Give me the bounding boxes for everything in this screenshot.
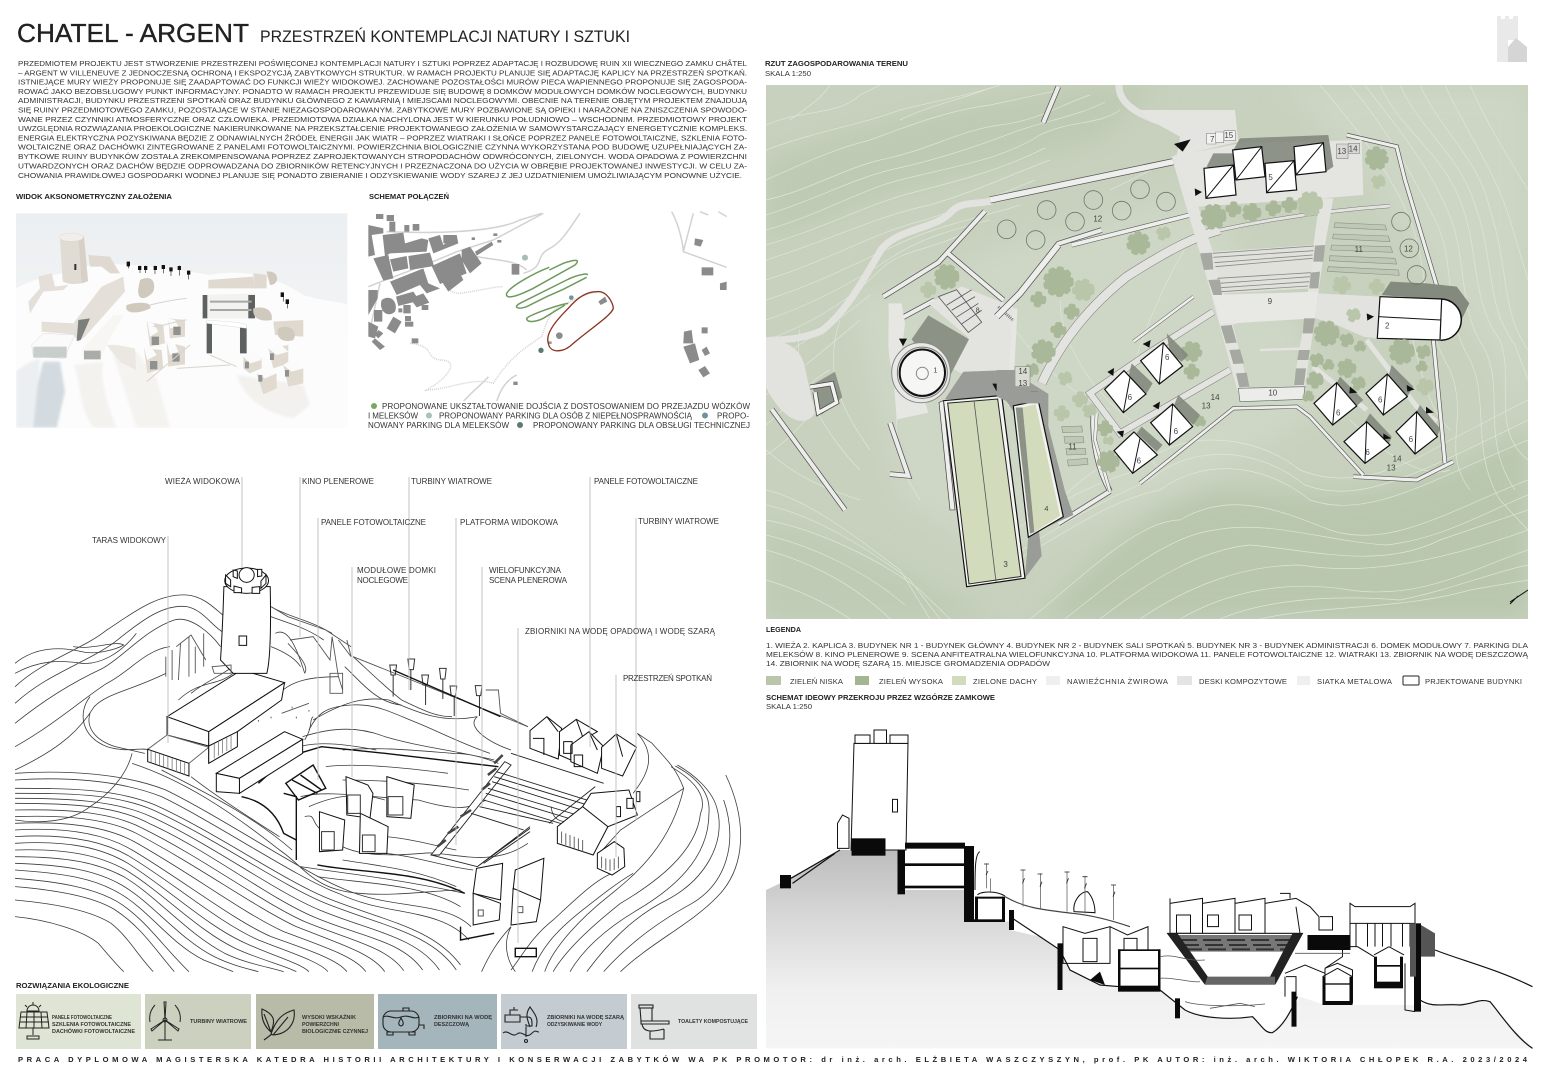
curved walkways	[1042, 206, 1390, 433]
plan numbers: 4	[1044, 504, 1048, 513]
entry arrows	[899, 338, 1038, 392]
text block: legend: MELEKSÓW 8. KINO PLENEROWE 9. SCENA ANFITEATRALNA WIELOFUNKCYJNA 10. PLATFORMA WIDOKOWA 11. PANELE FOTOWOLTAICZNE 12. WIATRAKI 13. ZBIORNIK NA WODĘ DESZCZOWĄ	[766, 650, 1529, 659]
text block: project description: UWZGLĘDNIA ROZWIĄZANIA PROEKOLOGICZNE NAKIERUNKOWANE NA PRZEKSZTAŁCENIE PROJEKTOWANEGO ZAŁOŻENIA W SAMOWYSTARCZAJĄCY ENERGETYCZNIE KOMPLEKS.	[18, 124, 747, 133]
terrain line	[791, 850, 1532, 1048]
building 3	[939, 396, 1025, 587]
plan numbers: 13	[1337, 147, 1347, 156]
rectangular panels 11	[1062, 223, 1399, 466]
panel: biologically active surface	[256, 994, 374, 1049]
heading: connection scheme: SCHEMAT POŁĄCZEŃ	[369, 192, 449, 201]
plan numbers: 11	[1068, 442, 1077, 451]
legend: connection scheme: I MELEKSÓW	[368, 412, 418, 420]
text block: project description: ROWAĆ JAKO BEZOBSŁUGOWY PUNKT INFORMACYJNY. PONADTO W RAMACH PROJEKTU PRZEWIDUJE SIĘ BUDOWĘ 8 DOMKÓW MODUŁOWYCH DOMKÓW NOCLEGOWYCH, BUDYNKU	[18, 87, 747, 96]
terrain contours	[15, 595, 741, 972]
callouts: axonometric labels: ZBIORNIKI NA WODĘ OPADOWĄ I WODĘ SZARĄ	[525, 627, 716, 636]
panel: wind turbines: TURBINY WIATROWE	[190, 1019, 247, 1025]
plan numbers: 6	[1409, 435, 1414, 444]
icon: castle logo	[1497, 16, 1527, 62]
text block: project description	[18, 59, 748, 180]
panel: grey water tanks	[501, 994, 627, 1049]
callouts: axonometric labels: TURBINY WIATROWE	[411, 477, 492, 486]
plan numbers: 10	[1268, 389, 1278, 398]
chart: cross section through the castle hill	[766, 730, 1532, 1048]
upper curved road	[1119, 85, 1165, 123]
plan numbers: 6	[1165, 353, 1170, 362]
panel: solar panels	[16, 994, 141, 1049]
text block: project description: UTWARDZONYCH ORAZ DACHÓW BĘDZIE ODPROWADZANA DO ZBIORNIKÓW RETENCYJNYCH I PRZEZNACZONA DO UŻYCIA W OBRĘBIE PROJEKTOWANEJ INWESTYCJI. W CELU ZA-	[18, 161, 748, 170]
callouts: axonometric labels: PRZESTRZEŃ SPOTKAŃ	[623, 674, 712, 683]
legend: connection scheme	[368, 402, 750, 430]
icon: turbine	[150, 1002, 180, 1040]
left part of plan	[765, 85, 1165, 587]
text block: legend: 1. WIEŻA 2. KAPLICA 3. BUDYNEK NR 1 - BUDYNEK GŁÓWNY 4. BUDYNEK NR 2 - BUDYNEK SALI SPOTKAŃ 5. BUDYNEK NR 3 - BUDYNEK ADMINISTRACJI 6. DOMEK MODUŁOWY 7. PARKING DLA	[766, 641, 1529, 650]
callouts: axonometric labels: KINO PLENEROWE	[302, 477, 374, 486]
amphitheatre cross-section	[1160, 923, 1435, 1008]
legend: surface swatches: SIATKA METALOWA	[1317, 677, 1393, 686]
legend: surface swatches: ZIELONE DACHY	[973, 677, 1037, 686]
modular houses 6	[1105, 333, 1440, 473]
plan numbers: 6	[1137, 456, 1142, 465]
legend: surface swatches: PRJEKTOWANE BUDYNKI	[1425, 677, 1522, 686]
text block: project description: ADMINISTRACJI, BUDYNKU PRZESTRZENI SPOTKAŃ ORAZ BUDYNKU GŁÓWNEGO Z KAWIARNIĄ I MIEJSCAMI NOCLEGOWYMI. OBECNIE NA TERENIE OBJĘTYM PROJEKTEM ZNAJDUJĄ	[18, 96, 748, 105]
walls	[772, 87, 1110, 524]
icon: north arrow	[1510, 590, 1528, 604]
top plaza	[1172, 140, 1363, 207]
text block: legend: LEGENDA	[766, 625, 801, 634]
map roads	[368, 212, 727, 402]
access road	[765, 201, 992, 341]
text block: project description: BYTKOWE RUINY BUDYNKÓW ZOSTAŁA ZREKOMPENSOWANA POPRZEZ ZAPROJEKTOWANYCH STROPODACHÓW ODWRÓCONYCH, ZIELONYCH. WODA OPADOWA Z POWIERZCHNI	[18, 152, 747, 161]
legend: surface swatches: DESKI KOMPOZYTOWE	[1199, 677, 1287, 686]
legend: connection scheme: PROPO-	[717, 412, 749, 420]
callouts: axonometric labels: PANELE FOTOWOLTAICZNE	[594, 477, 698, 486]
modular houses: top row	[530, 717, 637, 776]
title: CHATEL - ARGENT	[17, 18, 249, 48]
building: second box	[216, 732, 303, 793]
plan numbers	[1018, 131, 1414, 473]
model houses	[144, 318, 303, 394]
plan numbers: 13	[1202, 402, 1211, 411]
chart: axonometric line drawing	[15, 568, 741, 972]
heading: ecological solutions: ROZWIĄZANIA EKOLOGICZNE	[16, 981, 129, 990]
modular houses: middle group	[319, 777, 414, 853]
building and shadow: small ruin	[810, 372, 842, 414]
plan numbers: 9	[1268, 297, 1273, 306]
plan numbers: 12	[1093, 215, 1103, 224]
plan numbers: 14	[1018, 367, 1028, 376]
long paths	[990, 135, 1453, 492]
panel: grey water tanks: ZBIORNIKI NA WODĘ SZARĄ	[547, 1015, 624, 1021]
callouts: axonometric labels: NOCLEGOWE	[357, 576, 408, 585]
icon: solar panel	[19, 1002, 49, 1039]
plan numbers: 7	[1210, 135, 1215, 144]
contour lines	[766, 85, 1528, 619]
icon: toilet	[639, 1005, 669, 1039]
map buildings	[368, 214, 727, 385]
panel: solar panels: PANELE FOTOWOLTAICZNE	[52, 1015, 112, 1021]
plan numbers: 14	[1349, 144, 1358, 153]
plan numbers: 13	[1018, 379, 1028, 388]
text block: project description: ENERGIA ELEKTRYCZNA POZYSKIWANA BĘDZIE Z ODNAWIALNYCH ŹRÓDEŁ ENERGII JAK WIATR – POPRZEZ WIATRAKI I SŁOŃCE POPRZEZ PANELE FOTOWOLTAICZNE, SZKLENIA FOTO-	[18, 133, 747, 142]
heading: site plan: SKALA 1:250	[765, 69, 811, 78]
title: PRZESTRZEŃ KONTEMPLACJI NATURY I SZTUKI	[260, 27, 630, 46]
callouts: axonometric labels: WIELOFUNKCYJNA	[489, 566, 562, 575]
plan numbers: 13	[1387, 464, 1396, 473]
panel: compost toilets	[631, 994, 757, 1049]
plan numbers: 14	[1393, 454, 1402, 463]
plan numbers: 3	[1003, 560, 1008, 569]
tower	[221, 568, 271, 673]
wind turbines	[984, 863, 1116, 920]
panel: solar panels: DACHÓWKI FOTOWOLTAICZNE	[52, 1027, 135, 1035]
title	[17, 18, 630, 48]
plan numbers: 15	[1224, 131, 1234, 140]
modular houses: lower group	[473, 858, 544, 925]
panel: rain water tanks: ZBIORNIKI NA WODĘ	[434, 1015, 492, 1021]
leader lines	[168, 477, 636, 943]
model amphitheatre	[203, 293, 255, 318]
panel: rain water tanks: DESZCZOWĄ	[434, 1022, 469, 1028]
plan numbers: 11	[1355, 245, 1364, 254]
plan numbers: 6	[1336, 408, 1341, 417]
dark stair area by building 4	[996, 370, 1040, 404]
accessible route (green)	[506, 260, 587, 321]
legend: surface swatches: ZIELEŃ NISKA	[790, 677, 844, 686]
plan numbers: 14	[1017, 366, 1025, 375]
castle tower	[838, 730, 908, 850]
chapel 2	[1377, 282, 1469, 340]
amphitheatre	[1172, 157, 1333, 402]
castle ruin walls	[166, 607, 528, 733]
footer credits: PRACA DYPLOMOWA MAGISTERSKA KATEDRA HISTORII ARCHITEKTURY I KONSERWACJI ZABYTKÓW WA PK PROMOTOR: dr inż. arch. ELŻBIETA WASZCZYSZYN, prof. PK AUTOR: inż. arch. WIKTORIA CHŁOPEK R.A. 2023/2024	[18, 1055, 1528, 1064]
plan numbers	[933, 306, 1048, 569]
roof outlines	[975, 852, 1415, 1012]
icon: leaf	[262, 1009, 294, 1040]
wind turbines	[390, 659, 501, 717]
gray roofs and shadows	[912, 316, 969, 374]
heading: site plan	[765, 59, 909, 78]
text block: project description: WANE PRZEZ CZYNNIKI ATMOSFERYCZNE ORAZ CZŁOWIEKA. PRZEDMIOTOWA DZIAŁKA NACHYLONA JEST W KIERUNKU POŁUDNIOWO – WSCHODNIM. PRZEDMIOTOWY PROJEKT	[18, 115, 747, 124]
legend: connection scheme: PROPONOWANY PARKING DLA OSÓB Z NIEPEŁNOSPRAWNOŚCIĄ	[439, 412, 693, 420]
plan numbers: 2	[1385, 321, 1390, 330]
plan numbers: 6	[1128, 393, 1133, 402]
callouts: axonometric labels: PLATFORMA WIDOKOWA	[460, 518, 559, 527]
legend: connection scheme: PROPONOWANY PARKING DLA OBSŁUGI TECHNICZNEJ	[533, 421, 750, 430]
meeting hall and chapel	[557, 790, 640, 875]
panel: compost toilets: TOALETY KOMPOSTUJĄCE	[678, 1019, 748, 1025]
panel: biologically active surface: WYSOKI WSKAŹNIK	[302, 1013, 356, 1021]
icon: tap and droplet	[503, 1007, 539, 1042]
callouts: axonometric labels: TARAS WIDOKOWY	[92, 536, 167, 545]
trees	[922, 266, 957, 296]
legend: surface swatches	[766, 676, 1522, 686]
right part of plan	[990, 110, 1469, 492]
wind turbine circles 12	[997, 180, 1426, 284]
panel: biologically active surface: POWIERZCHNI	[302, 1022, 339, 1028]
site plan	[765, 85, 1528, 619]
text block: project description: ISTNIEJĄCE MURY WIEŻY PROPONUJE SIĘ ZAADAPTOWAĆ DO FUNKCJI WIEŻY WIDOKOWEJ. ZACHOWANE POZOSTAŁOŚCI MURÓW PIECA WAPIENNEGO PROPONUJE SIĘ ZAGOSPODA-	[18, 78, 747, 87]
heading: site plan: RZUT ZAGOSPODAROWANIA TERENU	[765, 59, 909, 68]
panel: biologically active surface: BIOLOGICZNIE CZYNNEJ	[302, 1029, 368, 1035]
tower 1	[892, 343, 950, 403]
callouts: axonometric labels: MODUŁOWE DOMKI	[357, 566, 436, 575]
text block: project description: SIĘ RUINY PRZEDMIOTOWEGO ZAMKU, POZOSTAJĄCE W STANIE NIEZAGOSPODAROWANYM. ZABYTKOWE MURY POZBAWIONE SĄ OPIEKI I NARAŻONE NA ZNISZCZENIA SPOWODO-	[18, 106, 748, 114]
legend: surface swatches: NAWIEŹCHNIA ŻWIROWA	[1067, 677, 1169, 686]
text block: project description: WOLTAICZNE ORAZ DACHÓWKI ZINTEGROWANE Z PANELAMI FOTOWOLTAICZNYMI. POWIERZCHNIA BIOLOGICZNIE CZYNNA WYKORZYSTANA POD BUDOWĘ UZUPEŁNIAJĄCYCH ZA-	[18, 143, 748, 152]
black section cuts	[780, 838, 1421, 1027]
legend: surface swatches: ZIELEŃ WYSOKA	[879, 677, 944, 686]
heading: axonometric view: WIDOK AKSONOMETRYCZNY ZAŁOŻENIA	[16, 192, 173, 201]
terrain shading	[766, 85, 1528, 619]
callouts: axonometric labels: SCENA PLENEROWA	[489, 576, 568, 585]
chapel plaza	[1315, 293, 1380, 338]
trees	[1026, 148, 1432, 471]
icon: rain tank	[383, 1008, 424, 1035]
plan numbers: 8	[976, 306, 980, 315]
text block: project description: CHOWANIA PRAWIDŁOWEJ GOSPODARKI WODNEJ PLANUJE SIĘ PONADTO ZBIERANIE I ODZYSKIEWANIE WODY SZAREJ Z JEJ UZDATNIENIEM UMOŻLIWIAJĄCYM PONOWNE UŻYCIE.	[18, 171, 742, 180]
plan numbers: 5	[1268, 173, 1273, 182]
panel: solar panels: SZKLENIA FOTOWOLTAICZNE	[52, 1022, 131, 1028]
plan numbers: 6	[1174, 427, 1179, 436]
chart: connection map	[368, 212, 727, 402]
plan numbers: 6	[1365, 448, 1370, 457]
hill	[766, 850, 1532, 1048]
callouts: axonometric labels: WIEŻA WIDOKOWA	[165, 477, 241, 486]
ragged wall lines	[242, 747, 536, 957]
heading: section: SCHEMAT IDEOWY PRZEKROJU PRZEZ WZGÓRZE ZAMKOWE	[766, 693, 995, 702]
heading: section: SKALA 1:250	[766, 702, 812, 711]
text block: project description: PRZEDMIOTEM PROJEKTU JEST STWORZENIE PRZESTRZENI POŚWIĘCONEJ KONTEMPLACJI NATURY I SZTUKI POPRZEZ ADAPTACJĘ I ROZBUDOWĘ RUIN XII WIECZNEGO ZAMKU CHÂTEL	[18, 59, 747, 68]
plan numbers: 6	[1378, 396, 1383, 405]
panel: wind turbines	[145, 994, 251, 1049]
text block: legend	[766, 625, 1529, 668]
panel: grey water tanks: ODZYSKIWANIE WODY	[547, 1022, 602, 1028]
plan numbers: 1	[933, 365, 937, 374]
callouts: axonometric labels: TURBINY WIATROWE	[638, 517, 719, 526]
amphitheatre 8	[938, 290, 982, 332]
amphitheatre stage	[431, 753, 604, 867]
text block: project description: – ARGENT W VILLENEUVE Z JEDNOCZESNĄ OCHRONĄ I EKSPOZYCJĄ ZABYTKOWYCH STRUKTUR. W RAMACH PROJEKTU PLANUJE SIĘ ADAPTACJĘ KAPLICY NA PRZESTRZEŃ SPOTKAŃ.	[18, 68, 747, 77]
parking and water tanks	[1015, 131, 1360, 387]
callouts: axonometric labels	[92, 477, 719, 683]
plaza around tower	[928, 286, 1013, 375]
panel: rain water tanks	[378, 994, 497, 1049]
building 4	[1013, 401, 1063, 537]
administration building 5	[1204, 135, 1333, 198]
project boundary (red)	[548, 292, 613, 351]
plan numbers: 13	[1018, 378, 1026, 387]
panel: axonometric model view	[16, 213, 347, 428]
legend: connection scheme: NOWANY PARKING DLA MELEKSÓW	[368, 421, 509, 430]
entry arrows	[1107, 139, 1434, 439]
heading: section	[766, 693, 995, 711]
callouts: axonometric labels: PANELE FOTOWOLTAICZNE	[321, 518, 426, 527]
legend: connection scheme: PROPONOWANE UKSZTAŁTOWANIE DOJŚCIA Z DOSTOSOWANIEM DO PRZEJAZDU WÓZKÓW	[382, 402, 750, 411]
text block: legend: 14. ZBIORNIK NA WODĘ SZARĄ 15. MIEJSCE GROMADZENIA ODPADÓW	[766, 659, 1051, 668]
plan numbers: 12	[1404, 244, 1413, 253]
parking points	[522, 255, 574, 353]
hatch facade	[151, 734, 231, 775]
building: main box	[148, 670, 285, 776]
plan numbers: 14	[1211, 393, 1220, 402]
